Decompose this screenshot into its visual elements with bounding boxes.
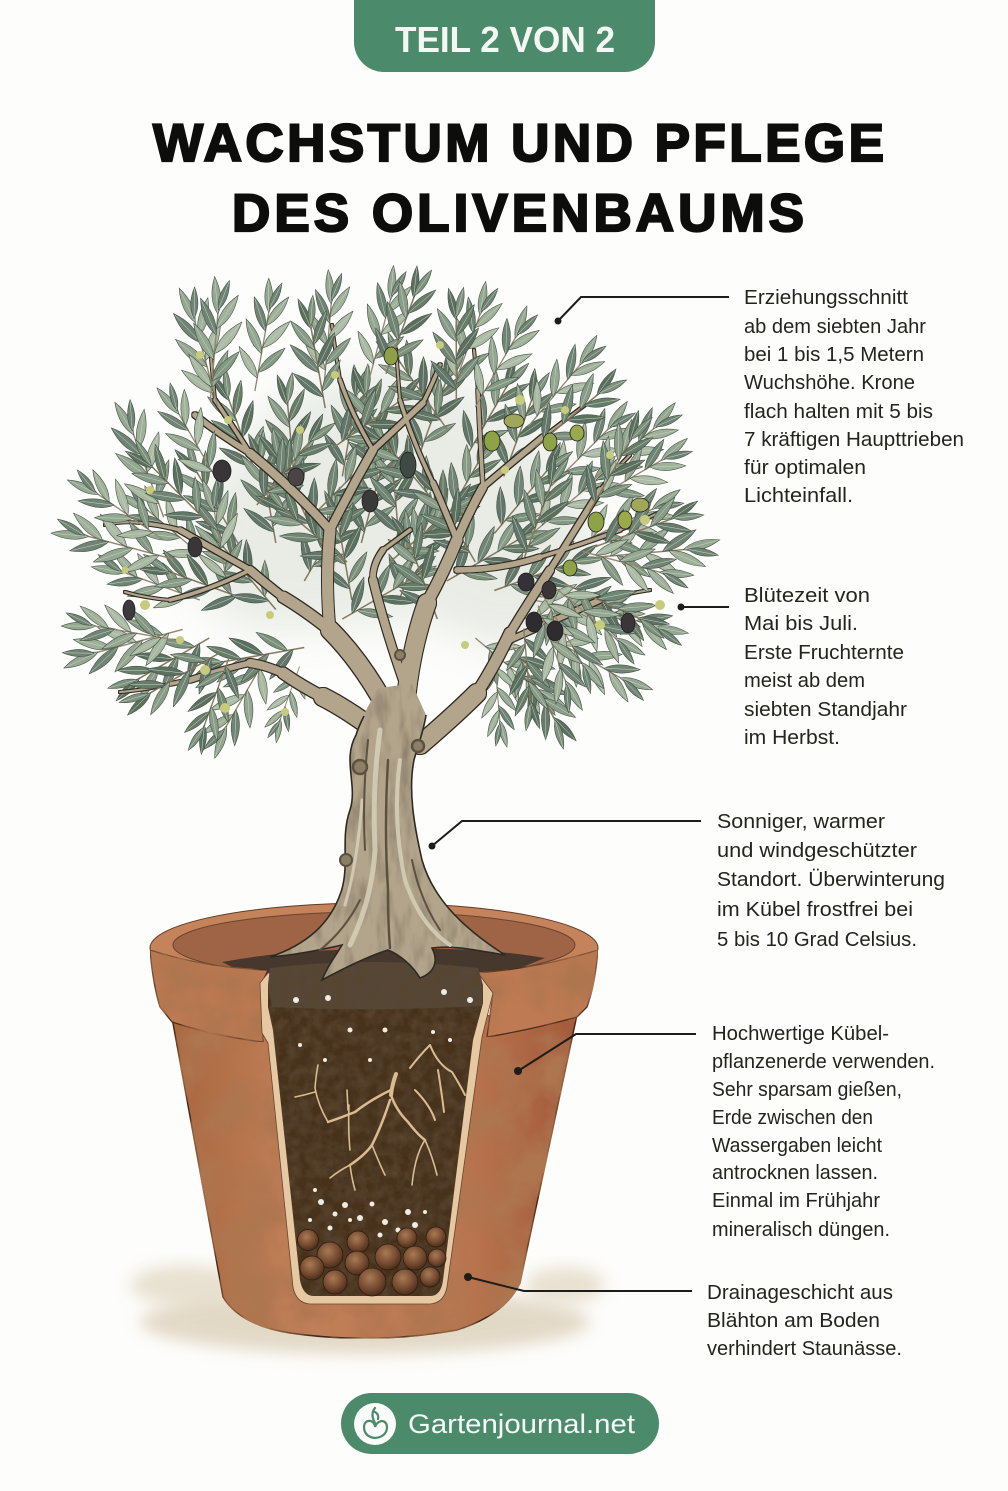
callout 1: pruning: flach halten mit 5 bis <box>744 400 933 423</box>
callout 4: soil and watering: Erde zwischen den <box>712 1106 873 1129</box>
title <box>153 114 884 243</box>
olives <box>123 347 649 641</box>
callout 2: flowering: siebten Standjahr <box>744 698 907 721</box>
callout 2: flowering: Blütezeit von <box>744 584 870 607</box>
branches <box>105 325 660 745</box>
badge: part label: TEIL 2 VON 2 <box>395 19 615 60</box>
callout 3: location: Sonniger, warmer <box>717 810 885 833</box>
blossoms <box>122 341 665 716</box>
callout 3: location: 5 bis 10 Grad Celsius. <box>717 928 917 951</box>
callout 5: drainage <box>464 1273 902 1360</box>
callout 4: soil and watering: antrocknen lassen. <box>712 1161 878 1184</box>
callout 2: flowering: Mai bis Juli. <box>744 612 858 635</box>
trunk outline <box>270 715 505 980</box>
crown: inner leaves <box>83 321 696 769</box>
pot: front rim left <box>150 950 268 1042</box>
pot: body <box>172 1015 577 1338</box>
callout 4: soil and watering: Hochwertige Kübel- <box>712 1022 889 1045</box>
trunk and surface roots <box>270 650 505 980</box>
callout 4: soil and watering <box>514 1022 935 1241</box>
drainage layer: expanded clay balls <box>298 1227 446 1296</box>
bark highlights <box>345 730 450 945</box>
callout 4: soil and watering: Sehr sparsam gießen, <box>712 1078 902 1101</box>
callout 1: pruning: bei 1 bis 1,5 Metern <box>744 343 924 366</box>
callout 3: location: Standort. Überwinterung <box>717 868 945 891</box>
callout 1: pruning: 7 kräftigen Haupttrieben <box>744 428 964 451</box>
ground wash <box>130 1265 605 1354</box>
drainage layer: perlite <box>293 989 473 1238</box>
bark shadows <box>320 650 440 950</box>
callout 5: drainage: Drainageschicht aus <box>707 1281 893 1304</box>
title: WACHSTUM UND PFLEGE <box>153 114 884 173</box>
callout 1: pruning: für optimalen <box>744 456 866 479</box>
callout 4: soil and watering: pflanzenerde verwenden. <box>712 1050 935 1073</box>
callout 2: flowering <box>678 584 907 749</box>
roots <box>295 1045 465 1190</box>
pot: front rim right <box>478 950 598 1037</box>
callout 2: flowering: meist ab dem <box>744 669 865 692</box>
pot: cut edge <box>260 973 493 1304</box>
callout 3: location <box>428 810 945 951</box>
callout 5: drainage: verhindert Staunässe. <box>707 1337 902 1360</box>
callout 1: pruning: Lichteinfall. <box>744 484 853 507</box>
pot: back rim and interior <box>150 903 598 993</box>
callout 1: pruning: Erziehungsschnitt <box>744 286 908 309</box>
title: DES OLIVENBAUMS <box>232 184 804 243</box>
badge: part label <box>354 0 655 72</box>
callout 5: drainage: Blähton am Boden <box>707 1309 880 1332</box>
soil: top layer <box>268 962 483 1009</box>
callout 1: pruning: Wuchshöhe. Krone <box>744 371 915 394</box>
callout 4: soil and watering: Einmal im Frühjahr <box>712 1189 880 1212</box>
crown: outer sprigs <box>44 257 724 762</box>
illustration: potted olive tree <box>44 257 724 1354</box>
crown: leaf wash <box>190 367 600 650</box>
callout 2: flowering: Erste Fruchternte <box>744 641 904 664</box>
callout 1: pruning: ab dem siebten Jahr <box>744 315 926 338</box>
callout 3: location: im Kübel frostfrei bei <box>717 898 913 921</box>
callout 3: location: und windgeschützter <box>717 839 917 862</box>
callout 1: pruning <box>554 286 964 507</box>
soil <box>268 975 483 1296</box>
callout 4: soil and watering: mineralisch düngen. <box>712 1218 890 1241</box>
callout 2: flowering: im Herbst. <box>744 726 840 749</box>
footer badge: Gartenjournal.net <box>341 1393 659 1454</box>
footer badge: Gartenjournal.net: Gartenjournal.net <box>408 1409 636 1439</box>
icon: sprout logo <box>354 1403 396 1445</box>
callout 4: soil and watering: Wassergaben leicht <box>712 1134 882 1157</box>
